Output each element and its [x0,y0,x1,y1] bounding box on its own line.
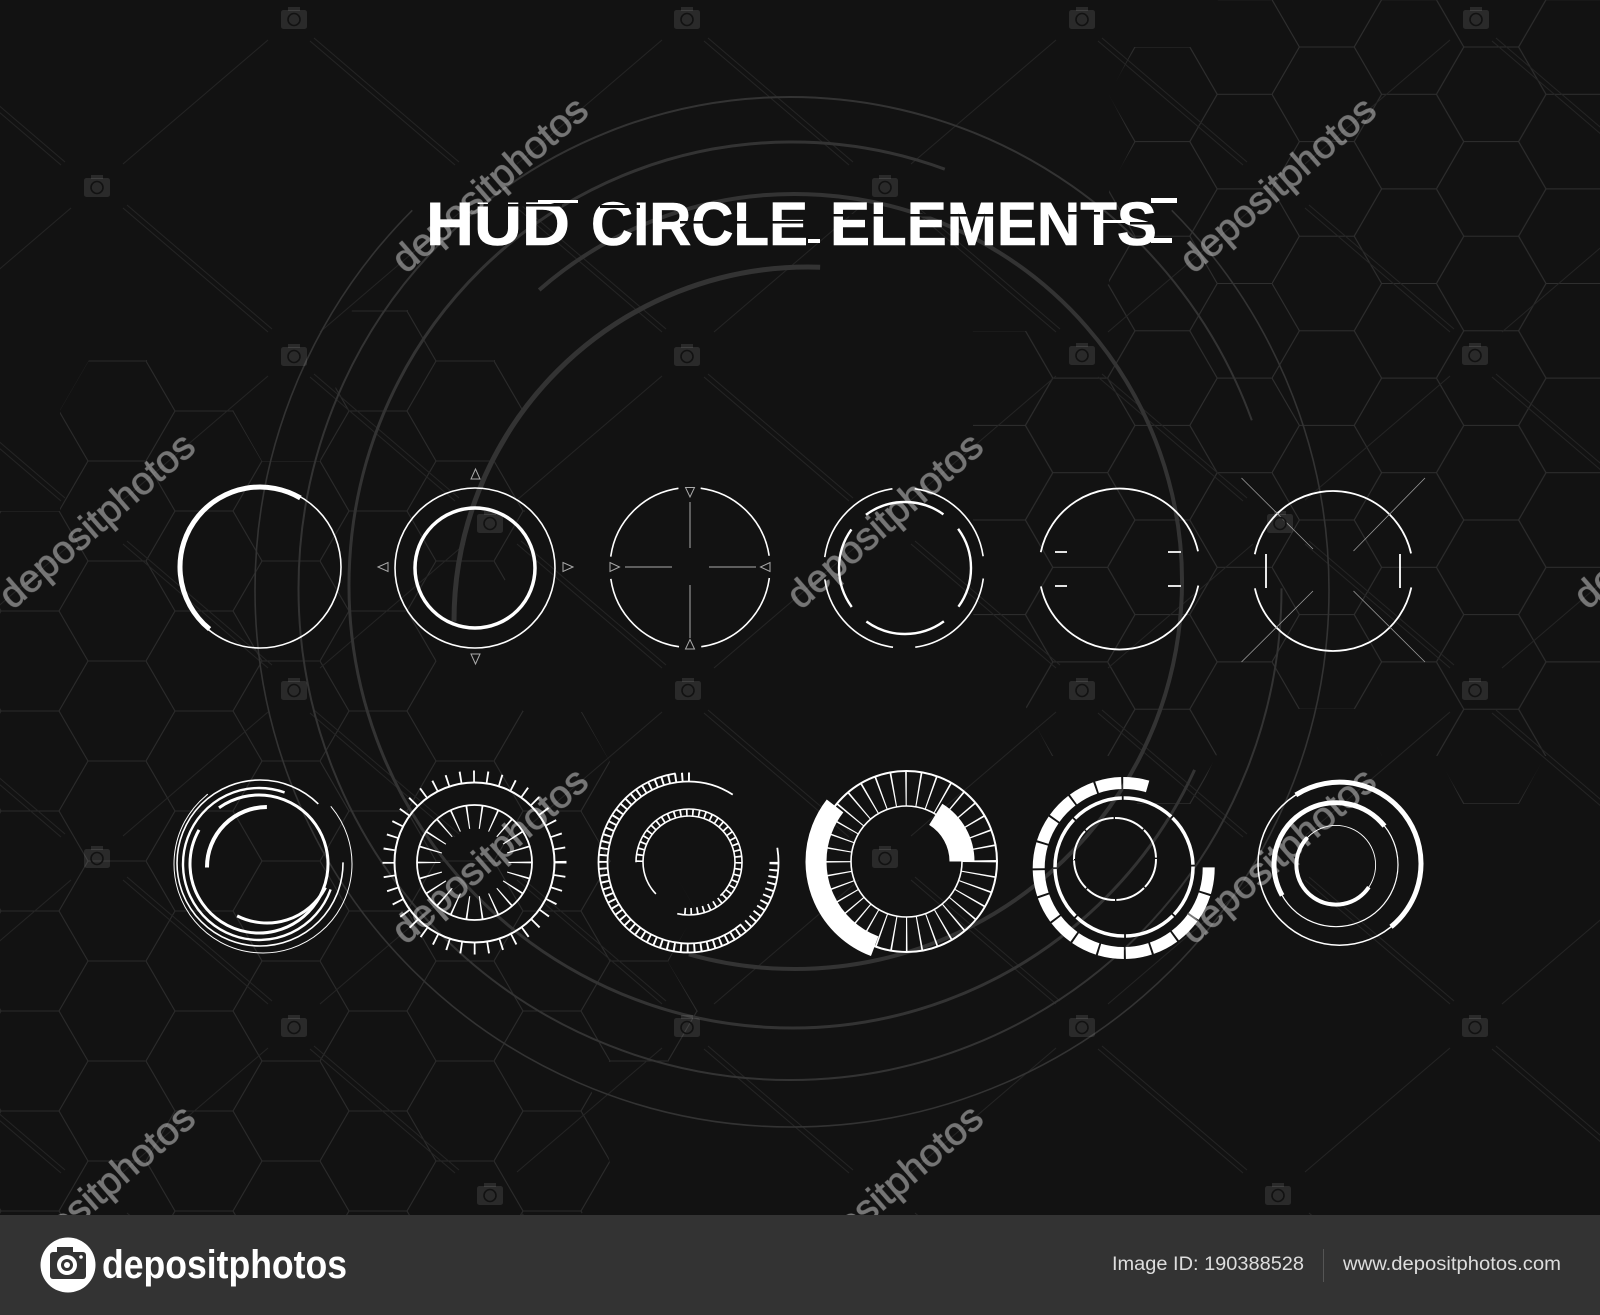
title: CIRCLE [591,190,808,258]
depositphotos watermarks: depositphotos [384,760,596,952]
circle 2: double ring with triangles [378,469,573,664]
circle 4: broken double ring [813,476,997,660]
website: www.depositphotos.com [1342,1254,1561,1275]
footer logo icon [40,1238,96,1292]
circle 12: three rings with thick arcs [1227,751,1452,976]
hexagon grid: left [0,300,710,1215]
depositphotos watermarks: depositphotos [1172,89,1384,281]
circle 11: segmented rings [1039,783,1209,953]
title [426,190,1177,258]
circle 9: comb bands [598,772,780,954]
circle 6: split ring with diagonals [1238,476,1428,666]
circle 8: ticked double ring [388,776,560,948]
footer logo text: depositphotos [102,1243,347,1287]
depositphotos watermarks: depositphotos [1172,760,1384,952]
depositphotos watermarks: depositphotos [779,1097,991,1289]
image id: Image ID: 190388528 [1112,1254,1304,1275]
footer bar [0,1215,1600,1315]
circle 5: split ring with ticks [1024,473,1215,665]
camera watermark icons [84,7,1489,1205]
title: ELEMENTS [830,190,1157,258]
depositphotos watermarks: depositphotos [779,425,991,617]
circle 3: crosshair [600,477,780,658]
hexagon grid: right [940,0,1600,810]
circle 10: spoked wheel with thick blocks [790,745,1023,978]
title: HUD [426,190,570,258]
depositphotos watermarks: depositphotos [384,89,596,281]
circle 1: thin ring with thick arc [147,454,373,680]
circle 7: concentric arcs [138,739,388,989]
